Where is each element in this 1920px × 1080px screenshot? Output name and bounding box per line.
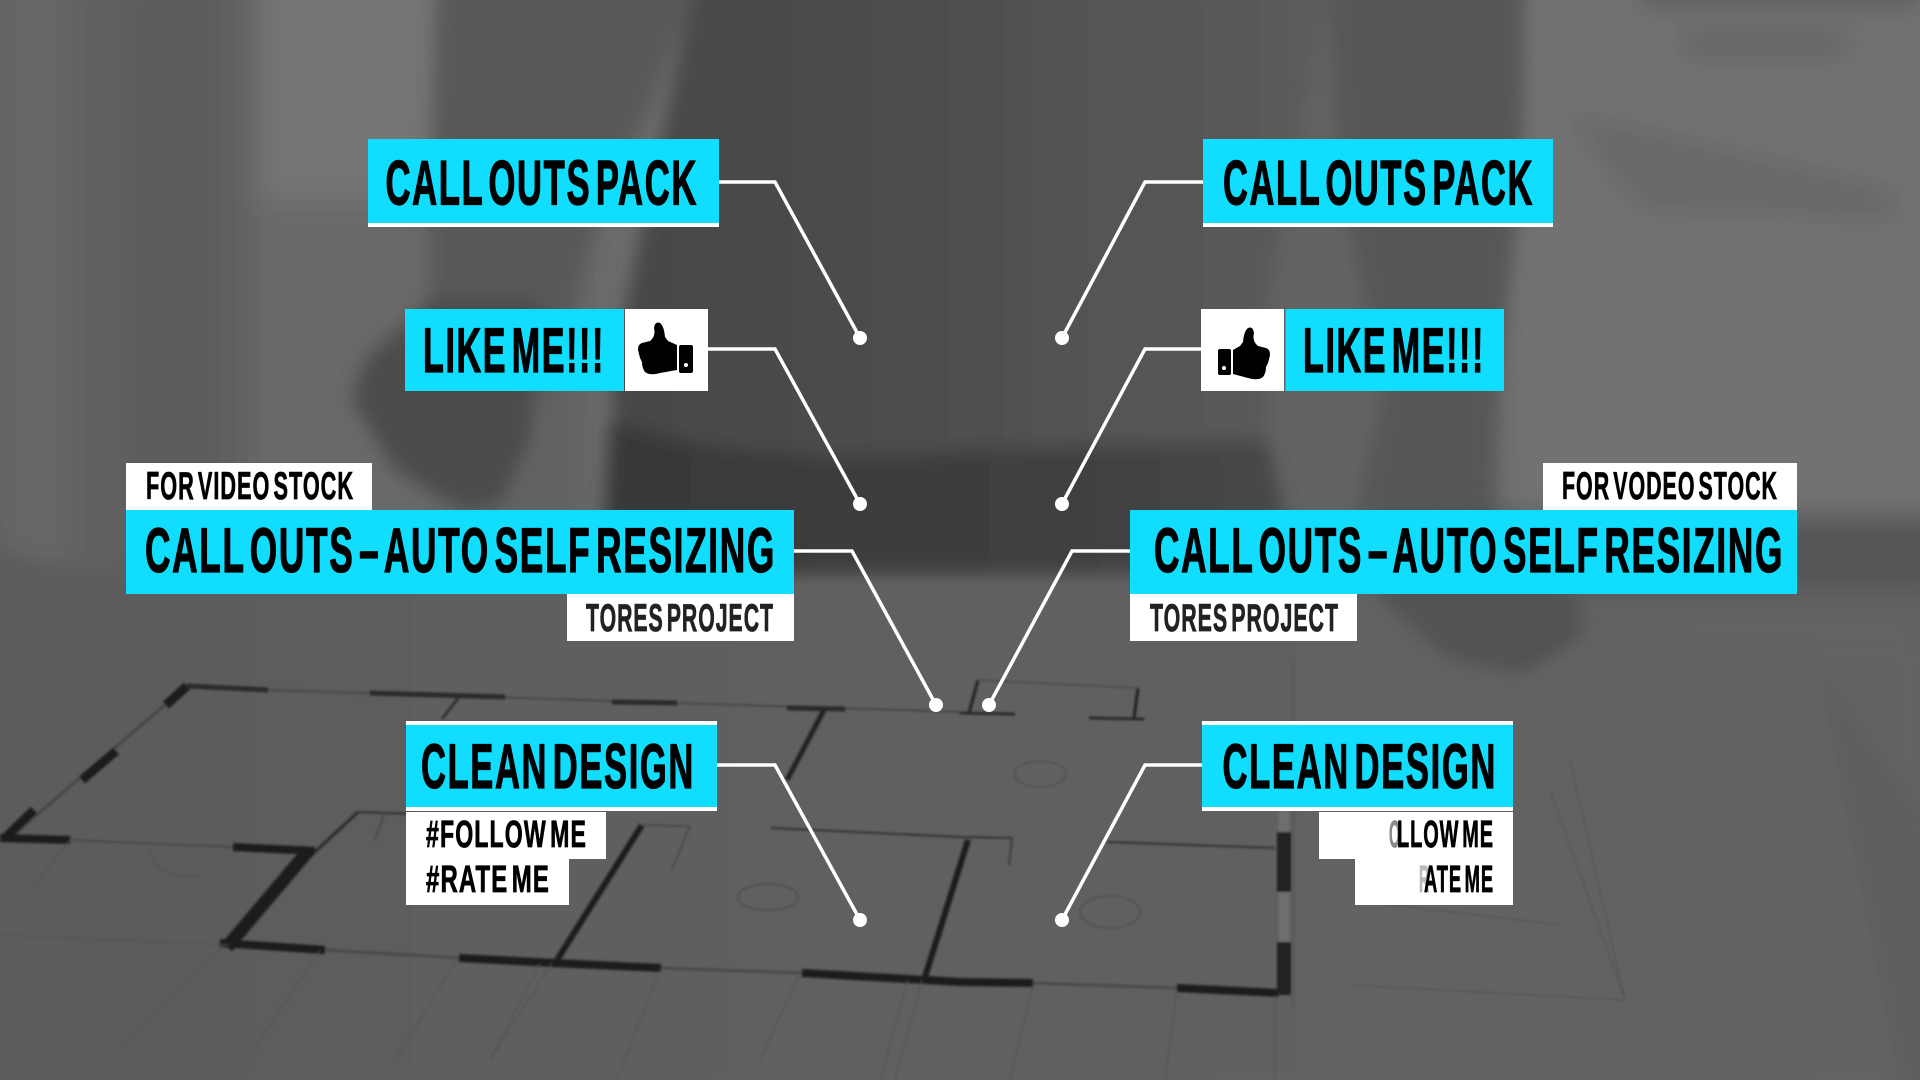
- callout: right "Clean Design": O: [1389, 814, 1401, 856]
- label text: CALL OUTS PACK: [386, 148, 698, 218]
- label box: [1130, 510, 1797, 594]
- top tag text: FOR VIDEO STOCK: [146, 465, 354, 508]
- tag: follow text: #FOLLOW ME: [426, 814, 587, 856]
- table surface: [0, 540, 1920, 1080]
- bottom tag text: TORES PROJECT: [586, 597, 774, 640]
- leader line: [1062, 765, 1202, 920]
- blueprint floor plan: [0, 680, 1284, 995]
- label text: CALL OUTS PACK: [1223, 148, 1534, 218]
- leader line: [708, 349, 860, 504]
- tag: rate text: #RATE ME: [426, 859, 550, 901]
- icon: thumbs up: [1218, 328, 1270, 379]
- leader line: [717, 765, 860, 920]
- callout: left "Call Outs - Auto Self Resizing": [126, 463, 943, 712]
- leader line: [719, 182, 860, 338]
- icon box: [625, 309, 708, 391]
- icon box: [1201, 309, 1284, 391]
- label box: [405, 309, 624, 391]
- leader line: [1062, 349, 1201, 504]
- anchor dot: [853, 913, 867, 927]
- callout: right "Like Me": [1055, 309, 1504, 511]
- label box: [368, 139, 719, 223]
- anchor dot: [982, 698, 996, 712]
- top tag: [126, 463, 372, 510]
- torso: [430, 0, 1525, 585]
- leader line: [989, 551, 1130, 705]
- label text: LIKE ME!!!: [1303, 316, 1485, 386]
- tag: follow: [406, 812, 606, 859]
- hands: [352, 300, 1585, 680]
- label text: CLEAN DESIGN: [421, 732, 695, 802]
- bottom tag: [1130, 594, 1357, 641]
- tag: follow: [1319, 812, 1513, 859]
- callout: right "Clean Design": ATE ME: [1424, 859, 1494, 901]
- anchor dot: [1055, 913, 1069, 927]
- anchor dot: [1055, 331, 1069, 345]
- callout: left "Clean Design": [406, 721, 867, 927]
- anchor dot: [1055, 497, 1069, 511]
- callout: top right "Call Outs Pack": [1055, 139, 1553, 345]
- leader line: [794, 551, 936, 705]
- tag: rate: [406, 859, 569, 905]
- icon: thumbs up: [638, 323, 693, 374]
- anchor dot: [853, 331, 867, 345]
- label text: CALL OUTS – AUTO SELF RESIZING: [145, 516, 776, 586]
- faint drafting lines: [0, 660, 1625, 1080]
- tag: rate: [1355, 859, 1513, 905]
- tag: follow text: LLOW ME: [1397, 814, 1494, 856]
- leader line: [1062, 182, 1203, 338]
- callout: right "Clean Design": [1055, 721, 1513, 927]
- label box: [1286, 309, 1504, 391]
- label box: [1203, 139, 1553, 223]
- top tag: [1543, 463, 1797, 510]
- label box: [126, 510, 794, 594]
- callout: left "Like Me": [405, 309, 867, 511]
- underline: [368, 223, 719, 227]
- callout: right "Clean Design": R: [1419, 859, 1430, 901]
- underline: [1203, 223, 1553, 227]
- anchor dot: [853, 497, 867, 511]
- callout: right "Call Outs - Auto Self Resizing": [982, 463, 1797, 712]
- label text: CLEAN DESIGN: [1222, 732, 1497, 802]
- callout: top left "Call Outs Pack": [368, 139, 867, 345]
- bottom tag: [567, 594, 794, 641]
- label text: LIKE ME!!!: [423, 316, 605, 386]
- label box with white rules: [406, 721, 717, 811]
- bottom tag text: TORES PROJECT: [1150, 597, 1339, 640]
- anchor dot: [929, 698, 943, 712]
- label box with white rules: [1202, 721, 1513, 811]
